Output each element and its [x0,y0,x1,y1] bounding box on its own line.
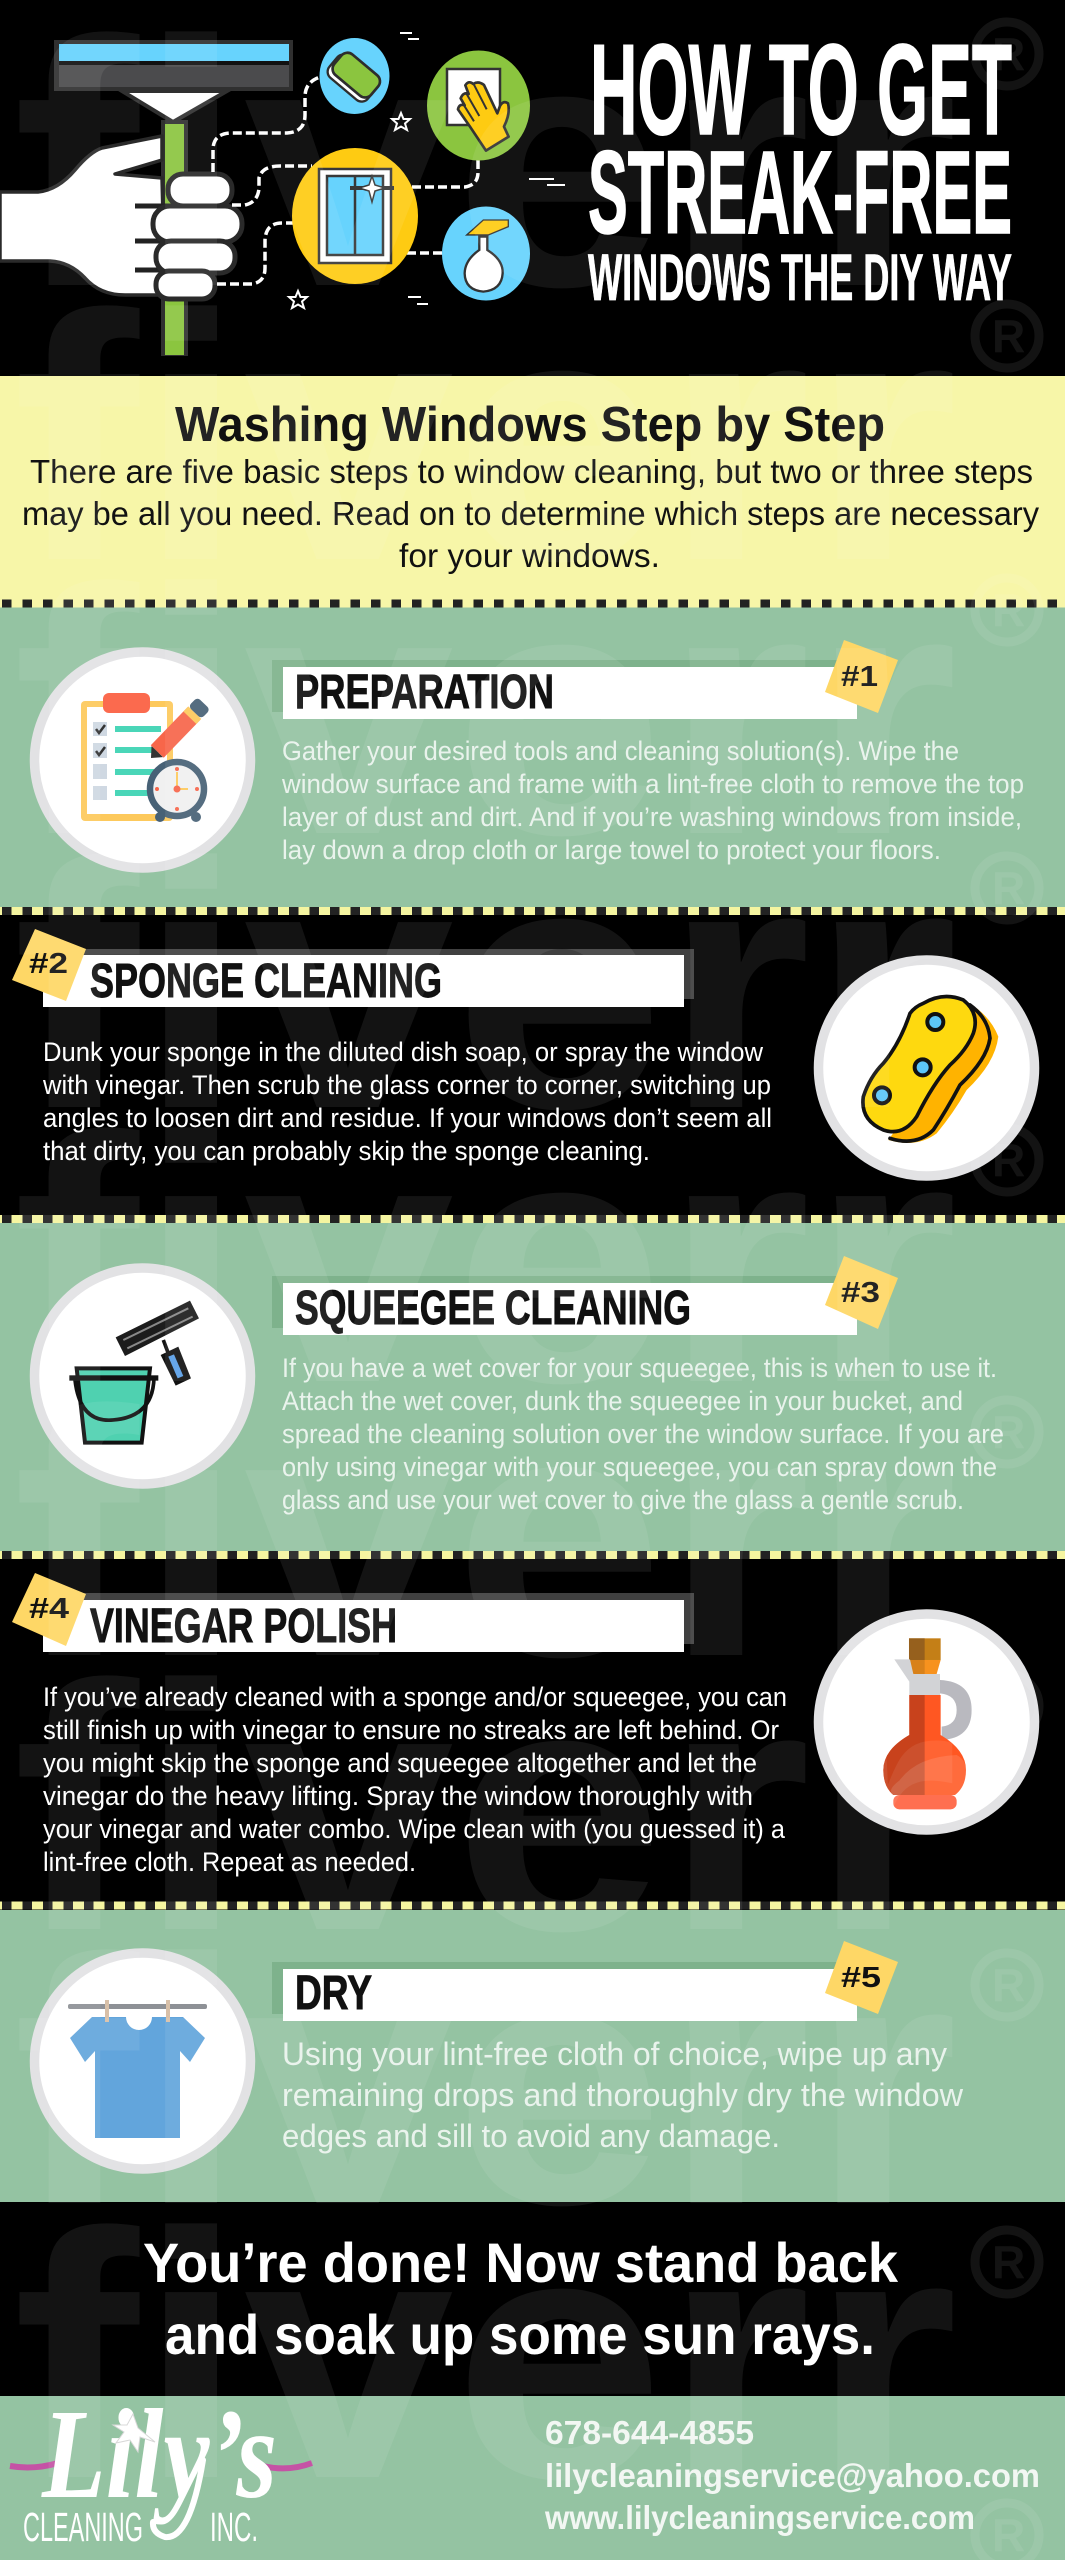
icon: spray bottle bubble [442,206,530,300]
contact details: www.lilycleaningservice.com [544,2499,975,2536]
body text: preparation: lay down a drop cloth or large towel to protect your floors. [282,835,941,865]
intro text: There are five basic steps to window cleaning, but two or three steps [30,453,1033,490]
body text: vinegar polish: you might skip the sponge and squeegee altogether and let the [43,1748,757,1778]
contact details: 678-644-4855 [545,2414,754,2451]
heading bar: dry [272,1962,857,2021]
badge: #5 [825,1941,898,2014]
badge: #3 [825,1256,898,1329]
background watermark: fiverr [13,2161,958,2552]
background watermark: fiverr [13,1339,958,1730]
background watermark: fiverr [13,1887,958,2278]
background watermark: R [992,862,1025,914]
background watermark: R [992,1134,1025,1186]
body text: vinegar polish: vinegar do the heavy lifting. Spray the window thoroughly with [43,1781,753,1811]
contact details: lilycleaningservice@yahoo.com [545,2457,1040,2494]
body text: vinegar polish: If you’ve already cleaned with a sponge and/or squeegee, you can [43,1682,787,1712]
body text: vinegar polish: lint-free cloth. Repeat as needed. [43,1847,416,1877]
panel: step 3 squeegee cleaning [0,1215,1065,1561]
dashed connector lines [213,77,478,284]
icon: sponge bubble [320,38,390,114]
icon: vinegar bottle in circle [818,1614,1034,1830]
background watermark: R [992,1406,1025,1458]
intro text [22,453,1039,574]
icon: glove bubble [427,50,530,160]
section dividers [0,604,1065,1906]
illustration: hand holding squeegee [0,40,293,356]
background watermark: fiverr [13,243,958,634]
logo: Lily's Cleaning Inc.: INC. [210,2504,258,2550]
heading bar: dry: DRY [295,1967,372,2020]
badge: #4: #4 [29,1593,69,1625]
body text: vinegar polish [43,1682,787,1877]
heading bar: sponge cleaning: SPONGE CLEANING [90,955,442,1008]
heading bar: squeegee cleaning: SQUEEGEE CLEANING [295,1282,691,1335]
body text: preparation: window surface and frame with a lint-free cloth to remove the top [281,769,1024,799]
contact details [544,2414,1040,2536]
background watermark: fiverr [13,791,958,1182]
heading bar: preparation: PREPARATION [295,666,554,719]
body text: squeegee cleaning: spread the cleaning solution over the window surface. If you are [282,1419,1004,1449]
background watermark: fiverr [13,1065,958,1456]
background watermark: R [992,1680,1025,1732]
badge: #4 [12,1573,86,1646]
icon: bucket and squeegee in circle [34,1268,250,1484]
body text: preparation [281,736,1024,865]
body text: dry: edges and sill to avoid any damage. [282,2118,780,2154]
heading bar: preparation [272,660,857,719]
body text: squeegee cleaning [282,1353,1004,1515]
intro text: may be all you need. Read on to determine which steps are necessary [22,495,1039,532]
icon: window bubble [292,148,418,284]
panel: closing message [0,2202,1065,2396]
icon: checklist in circle [34,652,250,868]
background watermark: R [992,310,1025,362]
body text: sponge cleaning: that dirty, you can probably skip the sponge cleaning. [43,1136,650,1166]
body text: vinegar polish: your vinegar and water combo. Wipe clean with (you guessed it) a [43,1814,786,1844]
background watermark: R [992,2509,1025,2560]
body text: dry: Using your lint-free cloth of choice, wipe up any [282,2036,947,2072]
body text: sponge cleaning: angles to loosen dirt and residue. If your windows don’t seem all [43,1103,772,1133]
background watermark: R [992,2236,1025,2288]
body text: dry [282,2036,964,2154]
body text: sponge cleaning: Dunk your sponge in the diluted dish soap, or spray the window [43,1037,763,1067]
body text: squeegee cleaning: Attach the wet cover, dunk the squeegee in your bucket, and [282,1386,963,1416]
closing text: and soak up some sun rays. [165,2303,875,2366]
panel: introduction [0,376,1065,600]
background watermark: fiverr [13,1613,958,2004]
body text: squeegee cleaning: glass and use your wet cover to give the glass a gentle scrub. [282,1485,964,1515]
background watermark: R [992,28,1025,80]
panel: step 2 sponge cleaning [0,907,1065,1215]
badge: #1: #1 [841,661,878,693]
intro text: for your windows. [399,537,660,574]
body text: sponge cleaning [42,1037,772,1166]
badge: #2 [12,929,86,1001]
logo: Lily's Cleaning Inc.: Lily’s [41,2383,277,2525]
closing text: You’re done! Now stand back [143,2231,899,2294]
heading: washing windows: Washing Windows Step by Step [175,398,885,452]
body text: squeegee cleaning: only using vinegar with your squeegee, you can spray down the [282,1452,997,1482]
body text: squeegee cleaning: If you have a wet cover for your squeegee, this is when to use it. [282,1353,997,1383]
logo: Lily's Cleaning Inc.: CLEANING [23,2504,143,2550]
background watermark: fiverr [13,517,958,908]
heading bar: sponge cleaning [43,949,694,1008]
heading bar: vinegar polish [43,1593,694,1653]
badge: #2: #2 [29,948,68,980]
panel: step 4 vinegar polish [0,1551,1065,1911]
body text: sponge cleaning: with vinegar. Then scrub the glass corner to corner, switching up [42,1070,771,1100]
body text: preparation: Gather your desired tools and cleaning solution(s). Wipe the [282,736,959,766]
background watermark: R [992,1959,1025,2011]
panel: step 1 preparation [0,607,1065,907]
body text: preparation: layer of dust and dirt. And if you’re washing windows from inside, [282,802,1022,832]
heading bar: vinegar polish: VINEGAR POLISH [90,1600,397,1653]
body text: dry: remaining drops and thoroughly dry the window [282,2077,964,2113]
background watermark: R [992,584,1025,636]
icon: sponge in circle [818,960,1034,1176]
icon: t-shirt in circle [34,1953,250,2169]
body text: vinegar polish: still finish up with vinegar to ensure no streaks are left behind. Or [43,1715,779,1745]
title [588,18,1012,314]
badge: #3: #3 [841,1277,880,1309]
closing text [143,2231,899,2366]
sparkle decorations [289,33,565,308]
badge: #5: #5 [841,1962,881,1994]
panel: step 5 dry [0,1910,1065,2202]
panel: footer [0,2383,1065,2560]
badge: #1 [825,640,898,713]
panel: header [0,0,1065,376]
